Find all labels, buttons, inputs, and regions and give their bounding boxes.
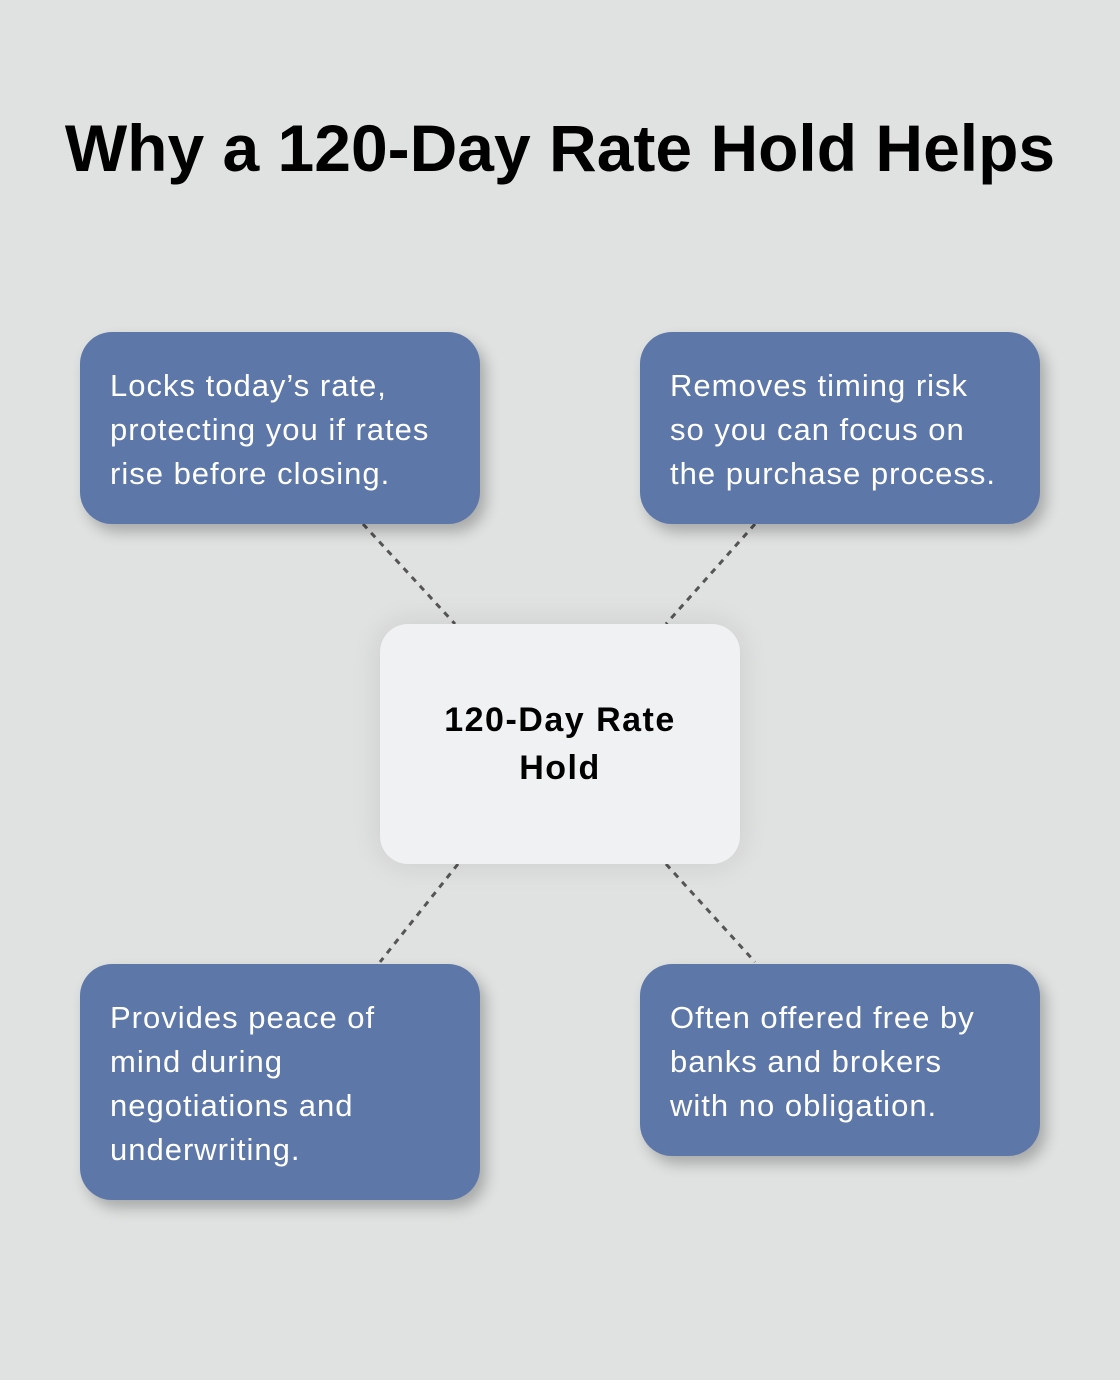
panel: bottom-right: Often offered free by bbox=[670, 1000, 975, 1035]
center node bbox=[380, 624, 740, 864]
panel: bottom-left: mind during bbox=[110, 1044, 283, 1079]
title: Why a 120-Day Rate Hold Helps bbox=[65, 111, 1055, 185]
panel: top-right bbox=[640, 332, 1040, 524]
panel: top-left: protecting you if rates bbox=[110, 412, 429, 447]
panel: bottom-right bbox=[640, 964, 1040, 1156]
panel: top-left: Locks today’s rate, bbox=[110, 368, 387, 403]
center node: 120-Day Rate bbox=[444, 701, 676, 739]
panel: top-right: Removes timing risk bbox=[670, 368, 968, 403]
panel: top-right: so you can focus on bbox=[670, 412, 965, 447]
panel: bottom-left bbox=[80, 964, 480, 1200]
panel: bottom-left: underwriting. bbox=[110, 1132, 300, 1167]
panel: bottom-left: negotiations and bbox=[110, 1088, 354, 1123]
panel: top-left: rise before closing. bbox=[110, 456, 390, 491]
center node: Hold bbox=[519, 749, 601, 787]
panel: bottom-right: with no obligation. bbox=[670, 1088, 937, 1123]
panel: top-left bbox=[80, 332, 480, 524]
panel: top-right: the purchase process. bbox=[670, 456, 996, 491]
panel: bottom-left: Provides peace of bbox=[110, 1000, 375, 1035]
panel: bottom-right: banks and brokers bbox=[670, 1044, 942, 1079]
